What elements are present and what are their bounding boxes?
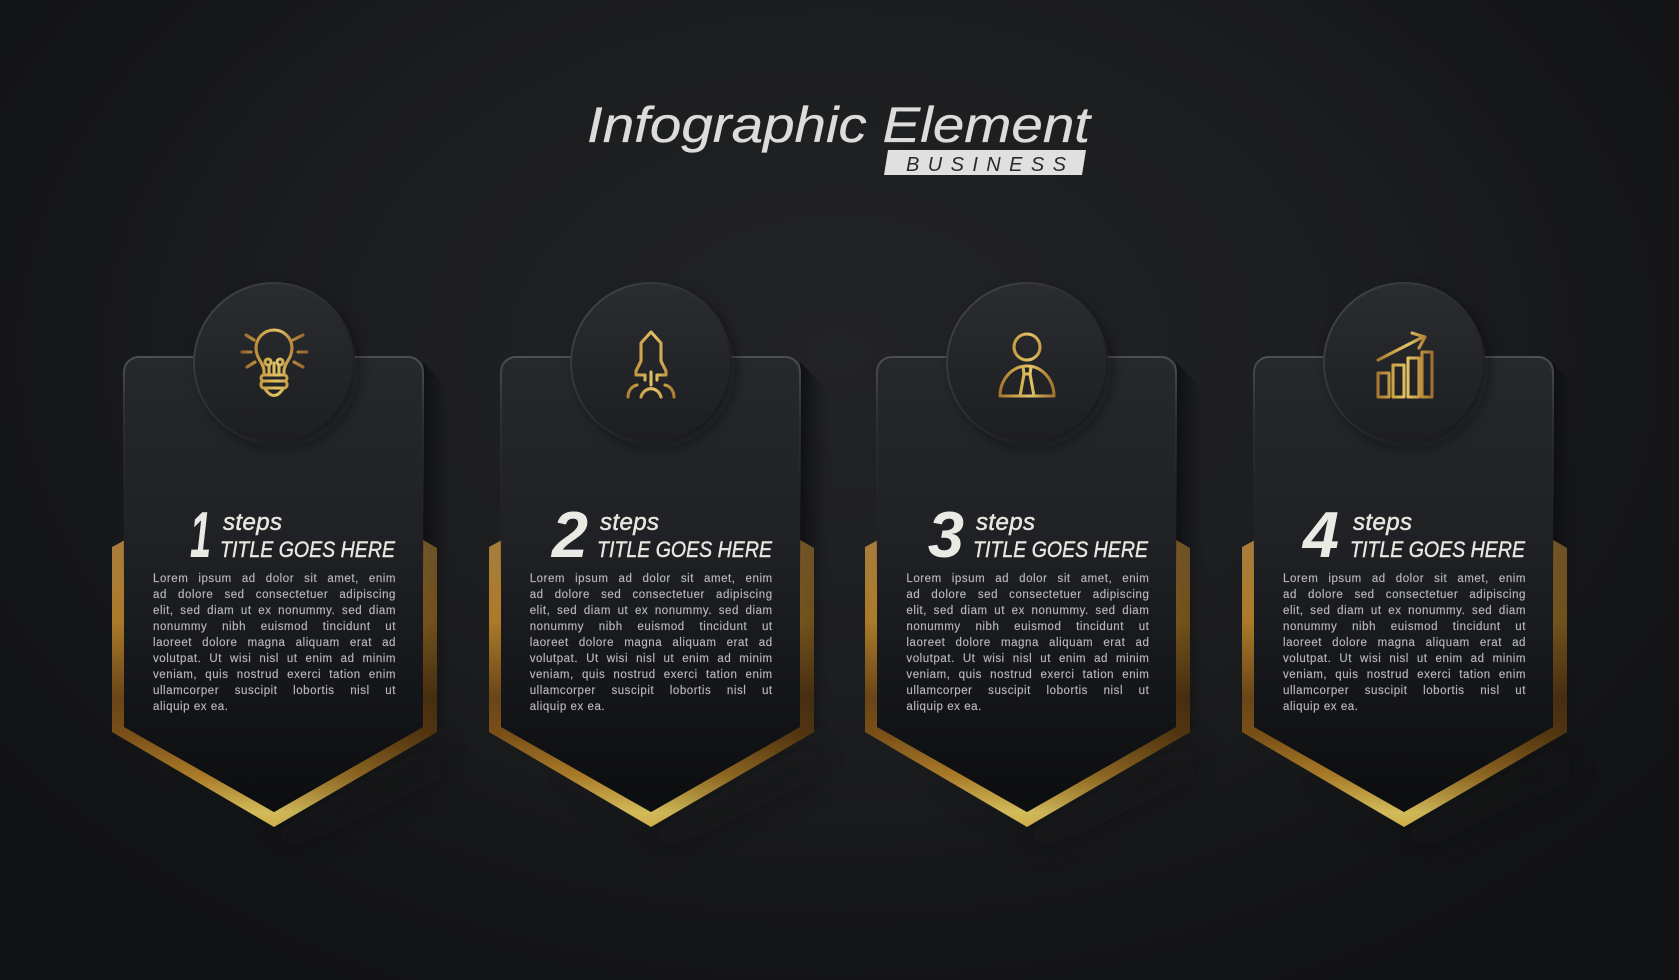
subtitle banner: BUSINESS: BUSINESS xyxy=(906,154,1067,176)
body text: aliquip ex ea. xyxy=(530,701,605,713)
body text: ullamcorper suscipit lobortis nisl ut xyxy=(906,685,1149,697)
body text: volutpat. Ut wisi nisl ut enim ad minim xyxy=(1283,653,1526,665)
body text: ullamcorper suscipit lobortis nisl ut xyxy=(1283,685,1526,697)
body text: volutpat. Ut wisi nisl ut enim ad minim xyxy=(906,653,1149,665)
body text: Lorem ipsum ad dolor sit amet, enim xyxy=(906,573,1149,585)
card xyxy=(501,357,800,812)
steps label: steps xyxy=(976,509,1035,536)
heading: Infographic Element: Infographic Element xyxy=(587,97,1092,153)
gold frame xyxy=(489,540,814,827)
body text: laoreet dolore magna aliquam erat ad xyxy=(906,637,1149,649)
step number: 4 xyxy=(1301,498,1339,571)
icon: growth chart xyxy=(1378,333,1432,397)
gold frame xyxy=(865,540,1190,827)
step title: TITLE GOES HERE xyxy=(220,537,395,562)
step number: 1 xyxy=(190,498,211,571)
body text: nonummy nibh euismod tincidunt ut xyxy=(906,621,1149,633)
icon circle xyxy=(571,283,735,448)
body text: nonummy nibh euismod tincidunt ut xyxy=(153,621,396,633)
step title: TITLE GOES HERE xyxy=(1350,537,1525,562)
icon: rocket xyxy=(628,332,674,397)
body text: veniam, quis nostrud exerci tation enim xyxy=(530,669,773,681)
steps label: steps xyxy=(223,509,282,536)
body text: aliquip ex ea. xyxy=(1283,701,1358,713)
gold frame xyxy=(112,540,437,827)
body text: volutpat. Ut wisi nisl ut enim ad minim xyxy=(530,653,773,665)
panel: step 3 xyxy=(865,282,1190,827)
body text: laoreet dolore magna aliquam erat ad xyxy=(1283,637,1526,649)
body text: nonummy nibh euismod tincidunt ut xyxy=(1283,621,1526,633)
body text: ullamcorper suscipit lobortis nisl ut xyxy=(530,685,773,697)
body text: aliquip ex ea. xyxy=(153,701,228,713)
step number: 2 xyxy=(550,498,588,571)
body text: elit, sed diam ut ex nonummy. sed diam xyxy=(530,605,773,617)
panel: step 1 xyxy=(112,282,437,827)
icon circle xyxy=(947,283,1111,448)
step number: 3 xyxy=(928,498,964,571)
steps label: steps xyxy=(600,509,659,536)
gold frame xyxy=(1242,540,1567,827)
body text xyxy=(153,572,396,713)
body text: ad dolore sed consectetuer adipiscing xyxy=(153,589,396,601)
panel: step 4 xyxy=(1242,282,1567,827)
body text: Lorem ipsum ad dolor sit amet, enim xyxy=(530,573,773,585)
panel: step 2 xyxy=(489,282,814,827)
body text: veniam, quis nostrud exerci tation enim xyxy=(1283,669,1526,681)
steps label: steps xyxy=(1353,509,1412,536)
body text: elit, sed diam ut ex nonummy. sed diam xyxy=(906,605,1149,617)
body text: volutpat. Ut wisi nisl ut enim ad minim xyxy=(153,653,396,665)
body text: elit, sed diam ut ex nonummy. sed diam xyxy=(153,605,396,617)
body text: ad dolore sed consectetuer adipiscing xyxy=(1283,589,1526,601)
body text: laoreet dolore magna aliquam erat ad xyxy=(530,637,773,649)
body text xyxy=(530,572,773,713)
icon circle xyxy=(194,283,358,448)
body text: laoreet dolore magna aliquam erat ad xyxy=(153,637,396,649)
step title: TITLE GOES HERE xyxy=(973,537,1149,562)
body text xyxy=(906,572,1149,713)
icon: light bulb xyxy=(242,330,307,396)
card xyxy=(1254,357,1553,812)
body text: ullamcorper suscipit lobortis nisl ut xyxy=(153,685,396,697)
step title: TITLE GOES HERE xyxy=(597,537,772,562)
body text: veniam, quis nostrud exerci tation enim xyxy=(906,669,1149,681)
title xyxy=(587,97,1092,176)
body text xyxy=(1283,572,1526,713)
icon circle xyxy=(1324,283,1488,448)
body text: veniam, quis nostrud exerci tation enim xyxy=(153,669,396,681)
body text: elit, sed diam ut ex nonummy. sed diam xyxy=(1283,605,1526,617)
card xyxy=(877,357,1176,812)
body text: aliquip ex ea. xyxy=(906,701,982,713)
body text: nonummy nibh euismod tincidunt ut xyxy=(530,621,773,633)
body text: ad dolore sed consectetuer adipiscing xyxy=(906,589,1149,601)
body text: Lorem ipsum ad dolor sit amet, enim xyxy=(1283,573,1526,585)
body text: Lorem ipsum ad dolor sit amet, enim xyxy=(153,573,396,585)
body text: ad dolore sed consectetuer adipiscing xyxy=(530,589,773,601)
icon: business person xyxy=(1000,334,1054,396)
subtitle banner: BUSINESS xyxy=(884,150,1086,176)
card xyxy=(124,357,423,812)
